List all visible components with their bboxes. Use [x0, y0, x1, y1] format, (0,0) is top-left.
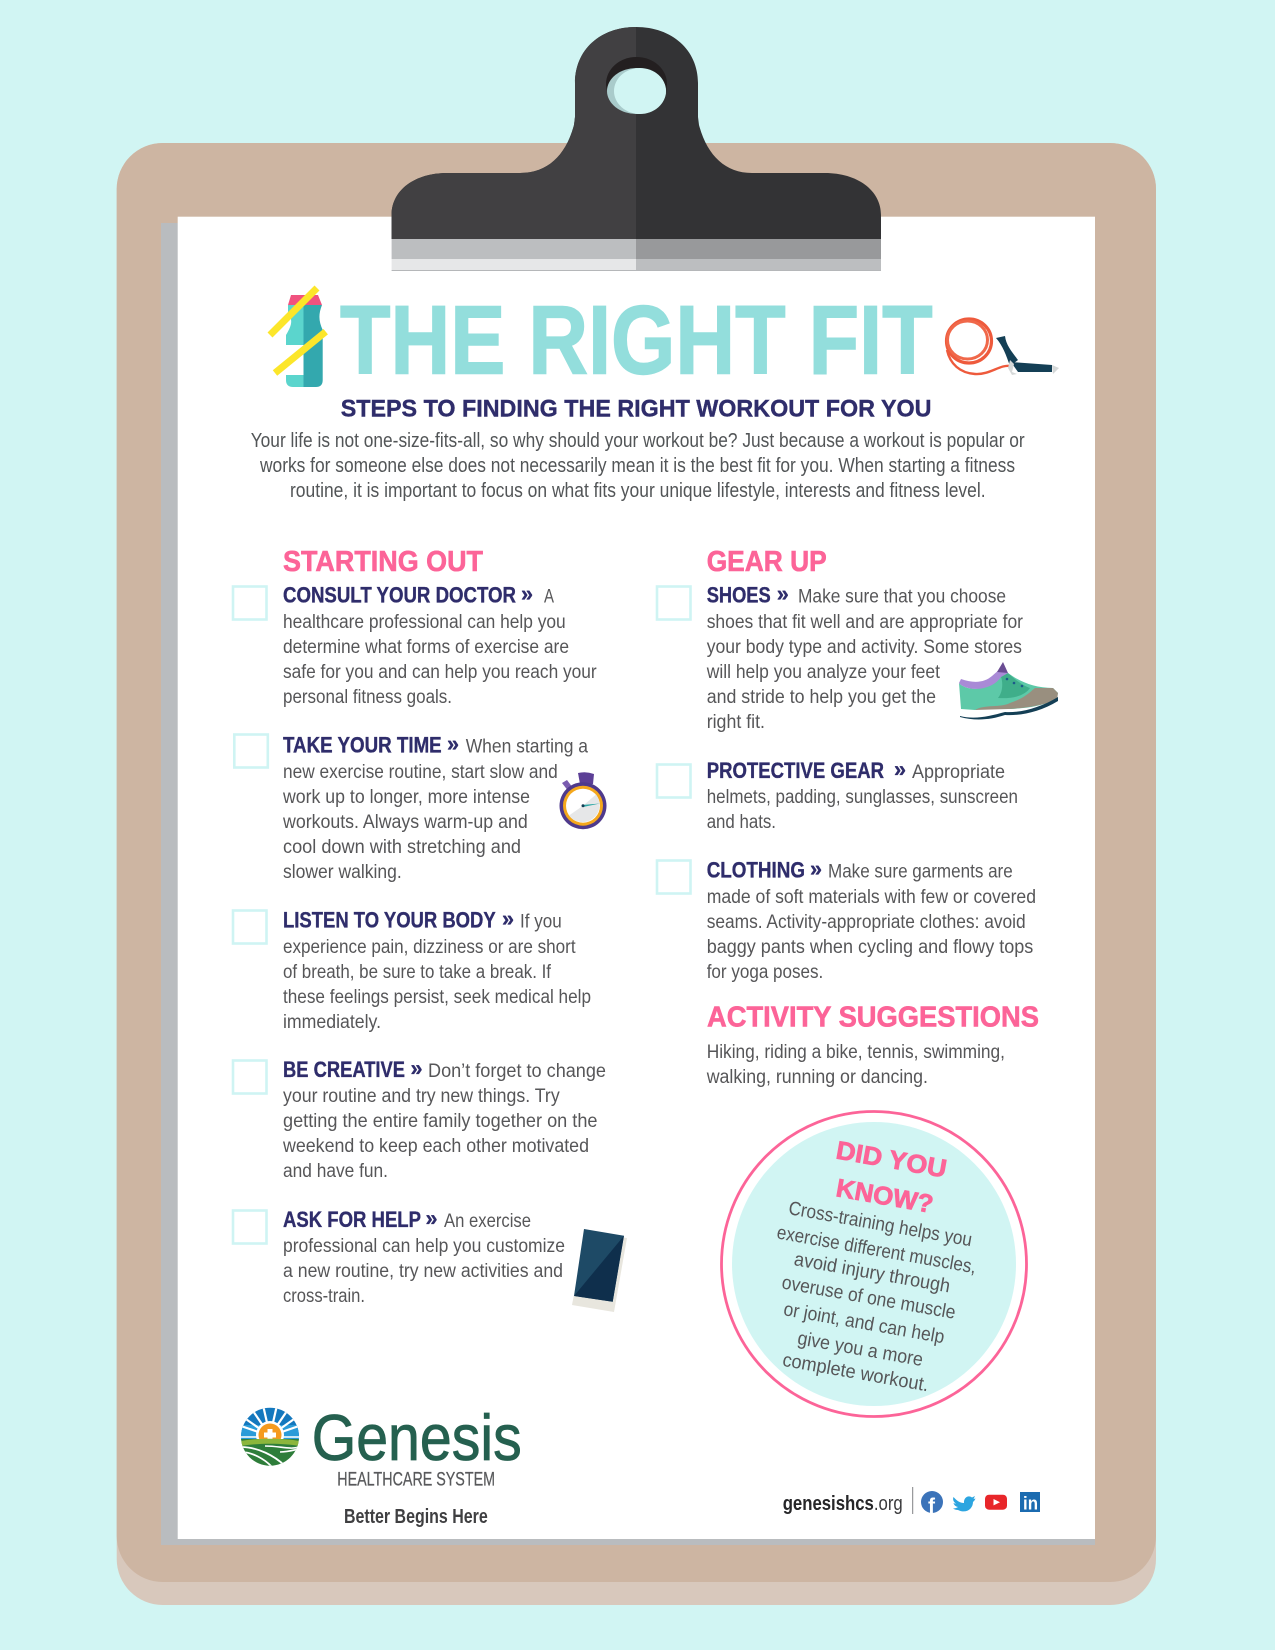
icon: facebook — [921, 1491, 943, 1518]
checklist item: shoes: » — [777, 581, 789, 606]
intro text: Your life is not one-size-fits-all, so why should your workout be? Just because a workout is popular or — [251, 430, 1025, 452]
heading: starting out: STARTING OUT — [283, 546, 483, 578]
checklist item: listen to your body: these feelings persist, seek medical help — [283, 987, 591, 1008]
checklist item: be creative: BE CREATIVE — [283, 1057, 405, 1082]
checklist item: take your time — [234, 731, 588, 883]
checklist item: ask for help: An exercise — [444, 1211, 531, 1232]
icon: phone — [572, 1229, 627, 1312]
text: did you know body: complete workout. — [781, 1350, 930, 1396]
checklist item: ask for help: cross-train. — [283, 1286, 365, 1307]
intro text: works for someone else does not necessarily mean it is the best fit for you. When starting a fitness — [259, 455, 1015, 477]
checklist item: clothing: CLOTHING — [707, 858, 805, 883]
intro text: routine, it is important to focus on what fits your unique lifestyle, interests and fitness level. — [290, 480, 986, 502]
checklist item: be creative — [233, 1055, 606, 1182]
checklist item: listen to your body: » — [502, 906, 514, 931]
logo: genesis healthcare system — [241, 1401, 522, 1528]
checklist item: consult your doctor: determine what forms of exercise are — [283, 637, 569, 658]
checklist item: take your time: cool down with stretching and — [283, 837, 521, 858]
wordmark: Genesis — [312, 1401, 522, 1474]
heading: did you know — [834, 1137, 949, 1219]
heading: gear up: GEAR UP — [707, 546, 827, 578]
checklist item: be creative: your routine and try new things. Try — [283, 1086, 560, 1107]
icon: linkedin: in — [1023, 1494, 1038, 1514]
icon: youtube — [985, 1495, 1007, 1510]
checklist item: be creative: » — [410, 1055, 422, 1080]
checklist item: take your time: » — [447, 731, 459, 756]
text: activity list: walking, running or dancing. — [706, 1067, 928, 1088]
text: did you know body: Cross-training helps you — [787, 1198, 974, 1251]
checklist item: listen to your body: If you — [520, 912, 562, 933]
checklist item: take your time: TAKE YOUR TIME — [283, 733, 442, 758]
checklist item: listen to your body: experience pain, dizziness or are short — [283, 937, 576, 958]
checklist item: ask for help: professional can help you customize — [283, 1236, 565, 1257]
checklist item: be creative: weekend to keep each other motivated — [282, 1136, 589, 1157]
checklist item: be creative: getting the entire family together on the — [283, 1111, 598, 1132]
checklist item: ask for help: ASK FOR HELP — [283, 1207, 421, 1232]
checklist item: shoes — [657, 581, 1024, 733]
checklist item: take your time: new exercise routine, start slow and — [283, 762, 558, 783]
clipboard clip — [392, 27, 881, 271]
checklist item: protective gear — [657, 756, 1018, 833]
checklist item: clothing: Make sure garments are — [828, 862, 1013, 883]
checklist item: protective gear: PROTECTIVE GEAR — [707, 758, 884, 783]
paper sheet — [178, 217, 1095, 1539]
checklist item: protective gear: helmets, padding, sunglasses, sunscreen — [707, 787, 1018, 808]
checklist item: protective gear: » — [894, 756, 906, 781]
checklist item: consult your doctor: personal fitness goals. — [283, 687, 452, 708]
heading: did you know: DID YOU — [834, 1137, 949, 1184]
icon: genesis sun and fields — [241, 1405, 299, 1468]
checklist item: shoes: shoes that fit well and are appropriate for — [707, 612, 1024, 633]
checklist item: consult your doctor — [233, 581, 597, 708]
heading: activity suggestions: ACTIVITY SUGGESTIONS — [707, 1002, 1039, 1034]
subtitle: STEPS TO FINDING THE RIGHT WORKOUT FOR YOU — [341, 396, 932, 423]
checklist item: listen to your body — [233, 906, 591, 1033]
callout: did you know — [722, 1112, 1026, 1416]
logo subtitle: HEALTHCARE SYSTEM — [337, 1469, 495, 1491]
checklist item: shoes: SHOES — [707, 583, 771, 608]
checklist item: take your time: workouts. Always warm-up and — [282, 812, 528, 833]
checklist item: clothing: » — [810, 856, 822, 881]
text: activity list — [706, 1042, 1005, 1088]
text: did you know body — [775, 1198, 978, 1396]
icon: running shoe — [959, 662, 1058, 719]
checklist item: take your time: When starting a — [466, 737, 588, 758]
checklist item: shoes: your body type and activity. Some stores — [707, 637, 1022, 658]
checklist item: shoes: will help you analyze your feet — [706, 662, 941, 683]
checklist item: clothing: made of soft materials with few or covered — [707, 887, 1036, 908]
checklist item: consult your doctor: A — [544, 587, 554, 608]
checklist item: ask for help: » — [426, 1205, 438, 1230]
icon: stopwatch — [560, 772, 606, 829]
checklist item: consult your doctor: CONSULT YOUR DOCTOR — [283, 583, 516, 608]
checklist item: be creative: Don’t forget to change — [428, 1061, 606, 1082]
panel: starting out — [233, 546, 627, 1312]
checklist item: ask for help: a new routine, try new activities and — [283, 1261, 563, 1282]
checklist item: clothing — [657, 856, 1036, 983]
checklist item: take your time: slower walking. — [283, 862, 402, 883]
checklist item: clothing: seams. Activity-appropriate clothes: avoid — [707, 912, 1026, 933]
clipboard board — [117, 143, 1156, 1605]
checklist item: take your time: work up to longer, more intense — [282, 787, 530, 808]
title: THE RIGHT FIT — [340, 286, 933, 394]
website: genesishcs.org — [783, 1493, 903, 1515]
icon: twitter — [953, 1496, 976, 1511]
checklist item: listen to your body: of breath, be sure to take a break. If — [283, 962, 552, 983]
text: activity list: Hiking, riding a bike, tennis, swimming, — [707, 1042, 1005, 1063]
checklist item: protective gear: Appropriate — [912, 762, 1005, 783]
panel: gear up — [657, 546, 1058, 983]
text: did you know body: exercise different muscles, — [775, 1223, 978, 1278]
tagline: Better Begins Here — [344, 1506, 488, 1528]
checklist item: listen to your body: immediately. — [283, 1012, 381, 1033]
checklist item: consult your doctor: safe for you and can help you reach your — [283, 662, 597, 683]
checklist item: consult your doctor: healthcare professional can help you — [283, 612, 566, 633]
text: did you know body: give you a more — [796, 1328, 925, 1371]
checklist item: shoes: and stride to help you get the — [707, 687, 936, 708]
checklist item: protective gear: and hats. — [707, 812, 776, 833]
checklist item: shoes: Make sure that you choose — [798, 587, 1006, 608]
intro text — [251, 430, 1025, 502]
checklist item: shoes: right fit. — [707, 712, 765, 733]
text: did you know body: overuse of one muscle — [780, 1273, 957, 1324]
text: did you know body: avoid injury through — [792, 1249, 952, 1297]
checklist item: consult your doctor: » — [521, 581, 533, 606]
checklist item: clothing: baggy pants when cycling and flowy tops — [707, 937, 1033, 958]
icon: water bottle with tape measure — [270, 288, 326, 387]
panel: activity suggestions — [706, 1002, 1039, 1088]
footer: website and social links — [783, 1487, 1040, 1518]
icon: jump rope — [946, 319, 1059, 375]
checklist item: clothing: for yoga poses. — [707, 962, 823, 983]
heading: did you know: KNOW? — [834, 1174, 935, 1219]
checklist item: ask for help — [233, 1205, 565, 1307]
checklist item: listen to your body: LISTEN TO YOUR BODY — [283, 908, 496, 933]
icon: facebook: f — [928, 1495, 936, 1518]
text: did you know body: or joint, and can help — [782, 1299, 946, 1348]
checklist item: be creative: and have fun. — [283, 1161, 388, 1182]
